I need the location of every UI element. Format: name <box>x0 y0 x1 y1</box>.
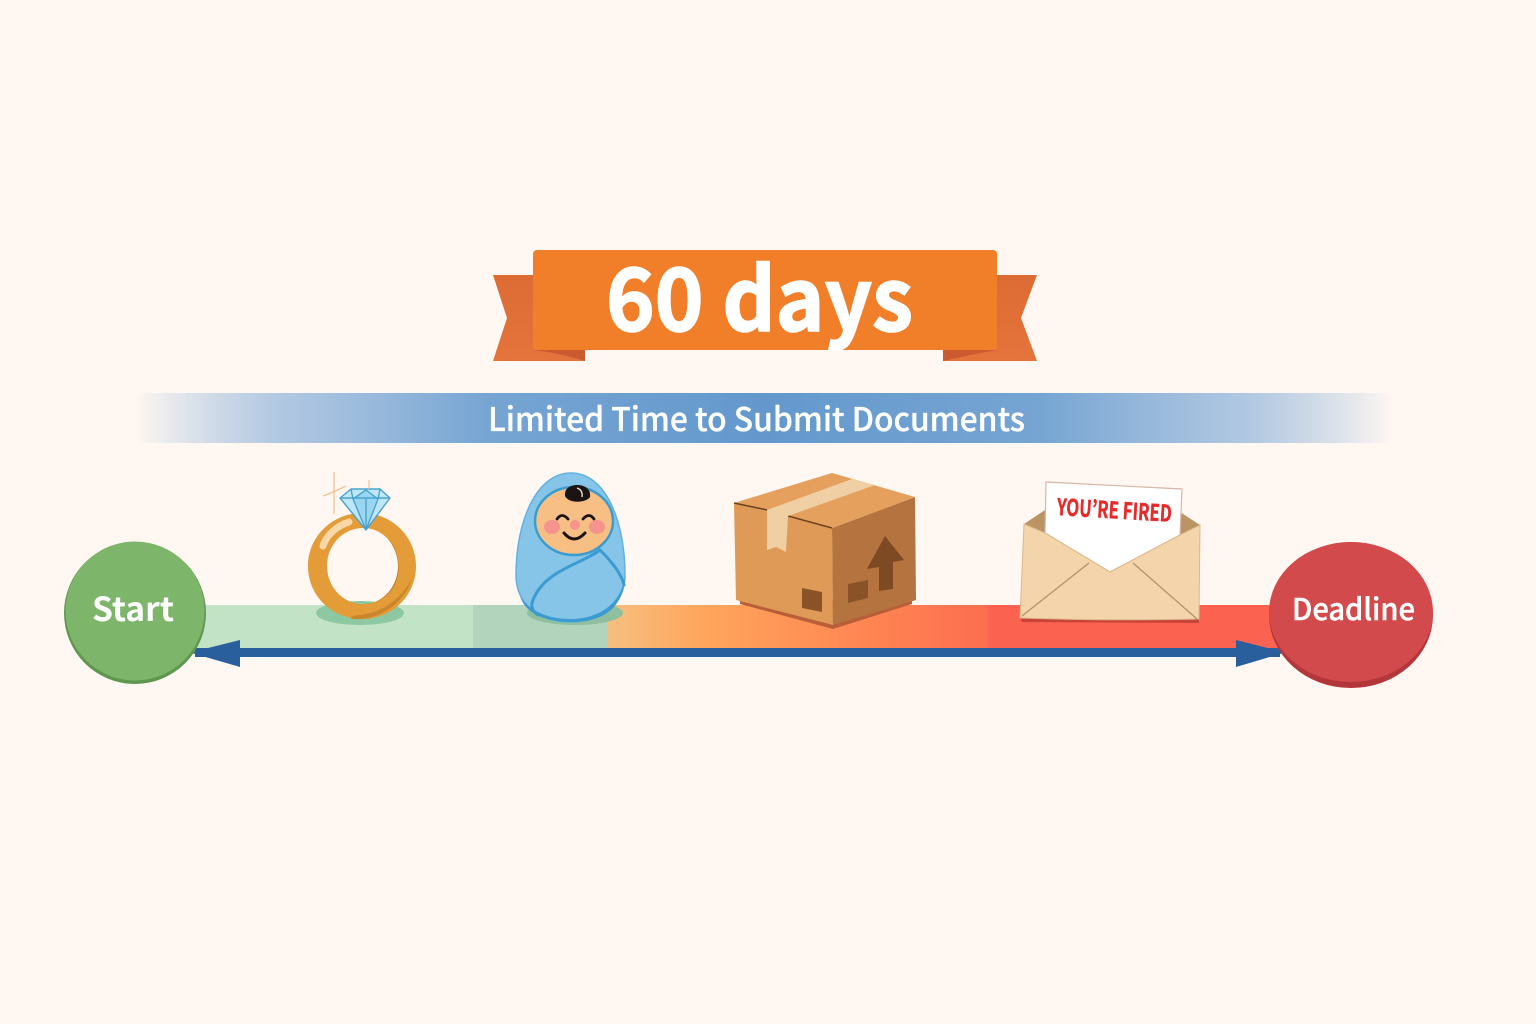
swaddle <box>516 473 625 622</box>
track: green segment <box>190 605 473 648</box>
double-headed duration arrow <box>190 640 1285 667</box>
letter text: YOU’RE FIRED <box>1055 488 1173 529</box>
envelope front <box>1020 524 1200 620</box>
baby face <box>535 487 613 555</box>
box right face <box>832 497 916 625</box>
swaddle fold lines <box>532 550 624 615</box>
subtitle text: Limited Time to Submit Documents <box>488 394 1025 441</box>
icon: envelope with termination letter <box>1020 482 1200 623</box>
cheeks and nose <box>544 520 605 534</box>
eyes <box>557 516 594 519</box>
icon: diamond ring <box>308 472 416 625</box>
track: orange gradient segment <box>607 605 988 648</box>
ring highlight <box>323 522 349 546</box>
deadline marker <box>1269 542 1433 688</box>
track: red segment <box>988 605 1288 648</box>
icon: cardboard box <box>734 473 916 629</box>
start marker <box>64 542 206 684</box>
ring shadow <box>316 601 404 625</box>
ring band <box>308 513 416 619</box>
box seams <box>734 503 832 528</box>
deadline label: Deadline <box>1292 585 1415 629</box>
band background <box>135 393 1393 443</box>
box left face <box>734 503 833 625</box>
ribbon main panel <box>533 250 997 350</box>
title text: 60 days <box>606 231 913 357</box>
envelope inner back <box>1024 510 1200 560</box>
diamond <box>340 489 390 530</box>
packing tape <box>767 479 875 552</box>
ribbon left tail <box>493 275 585 361</box>
envelope shadow <box>1020 618 1199 623</box>
title ribbon: 60 days <box>493 231 1037 361</box>
letter <box>1045 482 1182 572</box>
track: muted green segment <box>473 605 607 648</box>
timeline track <box>190 605 1288 648</box>
ribbon right tail <box>943 275 1037 361</box>
hair highlight <box>577 488 582 497</box>
ring inner shading <box>365 539 399 604</box>
smile <box>564 533 585 539</box>
baby shadow <box>527 601 623 625</box>
envelope flap lines <box>1022 563 1197 619</box>
sparkles <box>323 472 369 514</box>
box top <box>734 473 915 528</box>
box labels <box>802 580 868 612</box>
icon: swaddled baby <box>516 473 625 625</box>
baby hair <box>565 485 590 502</box>
box shadow <box>740 600 912 629</box>
up arrow mark <box>867 536 904 591</box>
ribbon folds <box>533 350 997 361</box>
start label: Start <box>92 583 174 631</box>
subtitle band <box>135 393 1393 443</box>
